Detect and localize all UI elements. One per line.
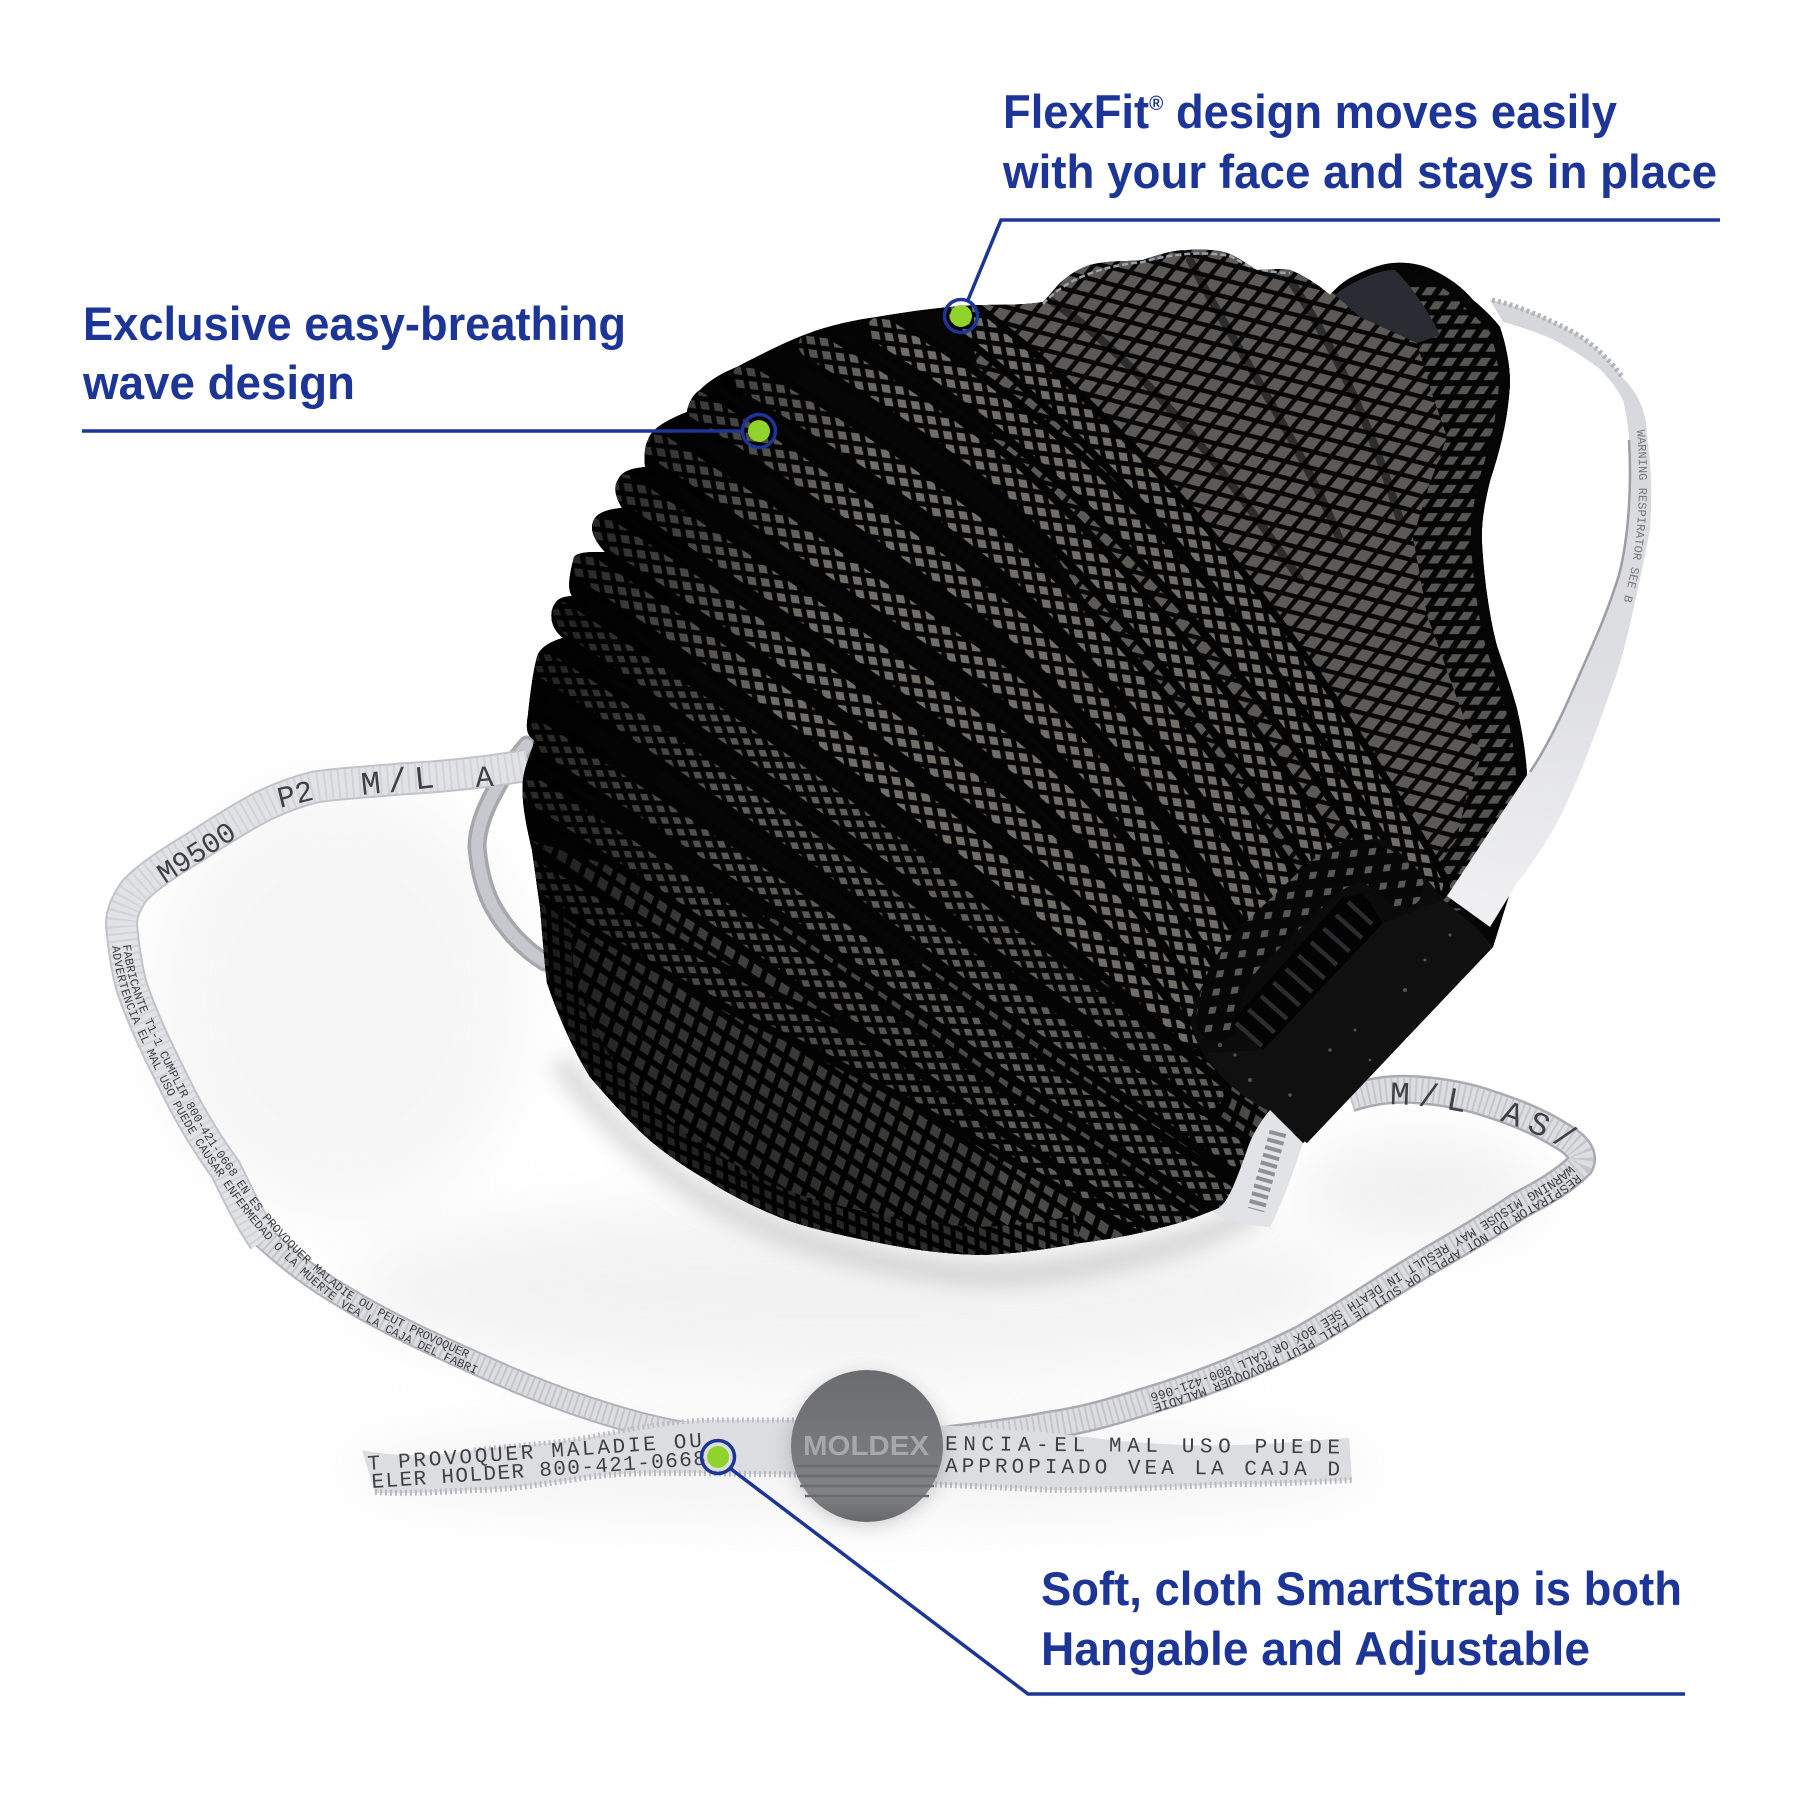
ridge M <box>532 790 1200 1240</box>
callout: SmartStrap <box>702 1440 1685 1694</box>
strap: back inner strand <box>477 745 545 962</box>
adjuster button <box>791 1370 943 1524</box>
callout: FlexFit design <box>944 85 1720 332</box>
lower mesh <box>520 840 1320 1270</box>
ridge E <box>697 405 1265 925</box>
leader line <box>968 220 1720 300</box>
callout: wave design <box>82 297 776 448</box>
strap printing: left loop model: M9500 <box>152 816 243 892</box>
button ridges <box>796 1466 938 1496</box>
tab lower pad <box>1207 900 1493 1143</box>
button logo: MOLDEX <box>803 1430 929 1461</box>
strap printing: upper right: WARNING RESPIRATOR SEE BOX MISUSE <box>1624 429 1647 602</box>
lower edge rim <box>540 907 1080 1255</box>
strap printing: left loop size: M/L <box>359 760 443 805</box>
strap printing: right tail line 2: APPROPIADO VEA LA CAJA D <box>945 1456 1340 1482</box>
heading text line 2: wave design <box>82 356 355 409</box>
marker dot <box>742 414 776 448</box>
strap printing: left tail line 1: T PROVOQUER MALADIE OU <box>367 1431 703 1477</box>
marker dot <box>944 300 978 332</box>
strap: small loop under tab <box>1213 1110 1303 1227</box>
lower left shading <box>532 804 1000 1255</box>
tab frame <box>1191 839 1493 1143</box>
button disc <box>791 1370 943 1522</box>
strap: upper right band <box>1447 298 1652 927</box>
ridge F <box>655 445 1235 965</box>
ridge A <box>962 315 1430 885</box>
flange inner surface <box>1332 270 1440 343</box>
tab speckle <box>1218 934 1452 1097</box>
tab scaled rim <box>1217 860 1403 1020</box>
strap printing: left loop standard: A <box>474 762 495 797</box>
heading text: Soft, cloth SmartStrap is both <box>1041 1562 1682 1615</box>
heading text: design moves easily <box>1163 85 1617 138</box>
strap printing: left loop fine line 2: ADVERTENCIA EL MAL USO PUEDE CAUSAR ENFERMEDAD O LA MUERTE VEA LA CAJA DEL FABRICANTE <box>112 946 478 1374</box>
ridge N <box>520 865 1180 1240</box>
ridge D <box>745 378 1295 905</box>
strap printing: right tail line 1: ENCIA-EL MAL USO PUEDE <box>945 1434 1340 1460</box>
heading text line 2: Hangable and Adjustable <box>1041 1622 1590 1675</box>
leader line <box>82 429 742 433</box>
strap tail: right <box>920 1425 1352 1490</box>
strap printing: left loop fine line 1: FABRICANTE T1-1 CUMPLIR 800-421-0668 EN ES PROVOQUER MALADIE OU PEUT PROVOQUER <box>123 945 469 1358</box>
ridge K <box>545 665 1290 1190</box>
strap printing: left tail line 2: ELER HOLDER 800-421-0668 <box>371 1449 707 1495</box>
ridge L <box>538 735 1260 1220</box>
left side shading <box>522 318 890 1038</box>
ridge J <box>560 615 1210 1095</box>
mask contact shadow <box>560 1060 1260 1275</box>
strap: lower right <box>944 1074 1596 1436</box>
flange black rim <box>523 250 1527 1255</box>
mask body <box>500 240 1530 1270</box>
wave ridges <box>520 315 1430 1240</box>
top stitching highlight <box>1043 254 1290 304</box>
strap printing: left loop class: P2 <box>274 776 317 818</box>
flange mesh <box>1325 282 1527 911</box>
strap tab <box>1191 839 1493 1143</box>
upper mesh panel <box>970 250 1482 870</box>
ridge B <box>880 330 1395 865</box>
ridge G <box>625 488 1215 990</box>
strap printing: size mark: M/L AS/ <box>1392 1082 1578 1144</box>
strap tail: left <box>362 1420 815 1495</box>
marker dot <box>702 1440 734 1474</box>
heading text: Exclusive easy-breathing <box>83 297 626 350</box>
upper mesh folds <box>1050 260 1400 580</box>
tab slot opening <box>1233 893 1383 1050</box>
strap: left loop <box>105 750 686 1431</box>
strap printing: lower right line 1: RESPIRATOR DO NOT APPLY OR SUIT TE FAIL PEUT PROVOQUER MALADIE OU <box>1154 1174 1582 1412</box>
mask silhouette <box>523 250 1527 1255</box>
soft floor shadows <box>150 780 1540 1520</box>
tab slot ribs <box>1236 902 1372 1046</box>
ridge I <box>580 564 1195 1035</box>
strap printing: lower right line 2: WARNING MISUSE MAY RESULT IN DEATH SEE BOX OR CALL 800-421-0668 HOLD <box>1151 1166 1576 1402</box>
ridge C <box>812 345 1335 875</box>
ridge H <box>600 528 1195 1005</box>
leader line <box>731 1469 1685 1694</box>
heading text: FlexFit <box>1003 85 1154 138</box>
heading text line 2: with your face and stays in place <box>1002 145 1717 198</box>
heading text: ® <box>1149 93 1164 115</box>
